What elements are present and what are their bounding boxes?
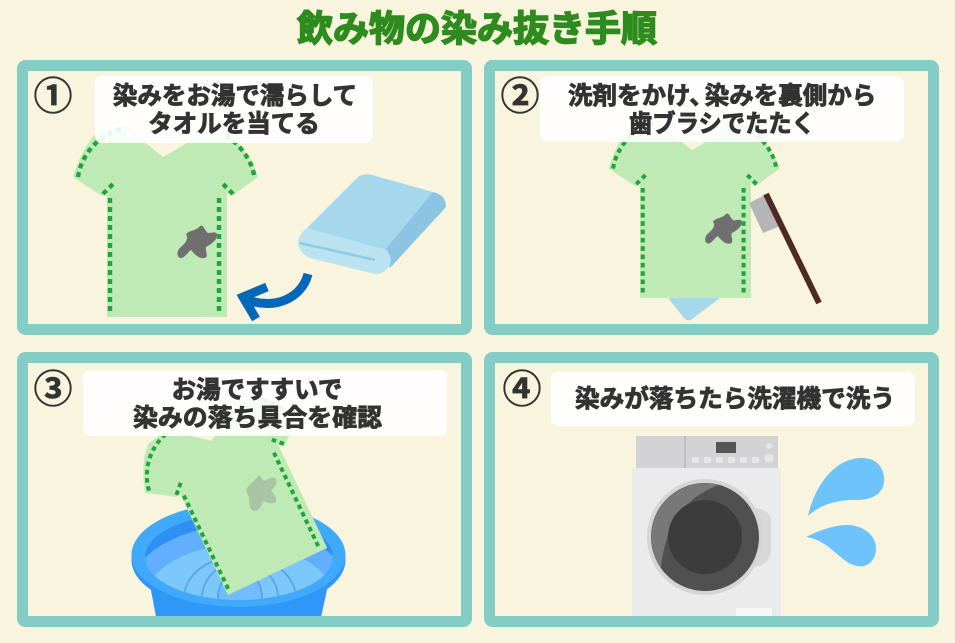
panel frame (22, 358, 466, 622)
arrow: towel to shirt (243, 274, 308, 319)
icon: folded towel (298, 174, 446, 274)
panel: step 3 (22, 358, 466, 643)
caption: step 3: お湯ですすいで (172, 376, 342, 404)
t-shirt being rinsed (125, 377, 353, 608)
panel frame (22, 66, 466, 330)
icon: wash basin (132, 509, 346, 616)
caption: step 1 (95, 76, 373, 143)
step number 4: ④ (502, 369, 542, 412)
caption: step 2 (540, 76, 904, 142)
caption: step 1: タオルを当てる (148, 110, 320, 138)
caption: step 3: 染みの落ち具合を確認 (133, 404, 383, 432)
caption: step 1: 染みをお湯で濡らして (113, 82, 357, 110)
panel frame (490, 358, 934, 622)
caption: step 3 (83, 370, 447, 436)
caption: step 2: 洗剤をかけ、染みを裏側から (568, 82, 876, 110)
panel: step 1 (22, 66, 466, 330)
panel frame (490, 66, 934, 330)
caption: step 4 (551, 372, 915, 426)
caption: step 4: 染みが落ちたら洗濯機で洗う (575, 384, 895, 413)
caption: step 2: 歯ブラシでたたく (629, 109, 815, 138)
icon: towel under shirt (668, 298, 720, 320)
icon: washing machine (632, 436, 781, 618)
panel: step 4 (490, 358, 934, 622)
step number 3: ③ (33, 369, 73, 412)
step number 1: ① (33, 76, 73, 119)
title: 飲み物の染み抜き手順 (297, 8, 657, 49)
fading stain (246, 476, 276, 511)
panel: step 2 (490, 66, 934, 330)
icon: toothbrush (749, 194, 819, 303)
t-shirt with stain (609, 120, 780, 298)
step number 2: ② (500, 76, 540, 119)
t-shirt with stain (73, 125, 258, 317)
icon: water drops (806, 458, 884, 566)
